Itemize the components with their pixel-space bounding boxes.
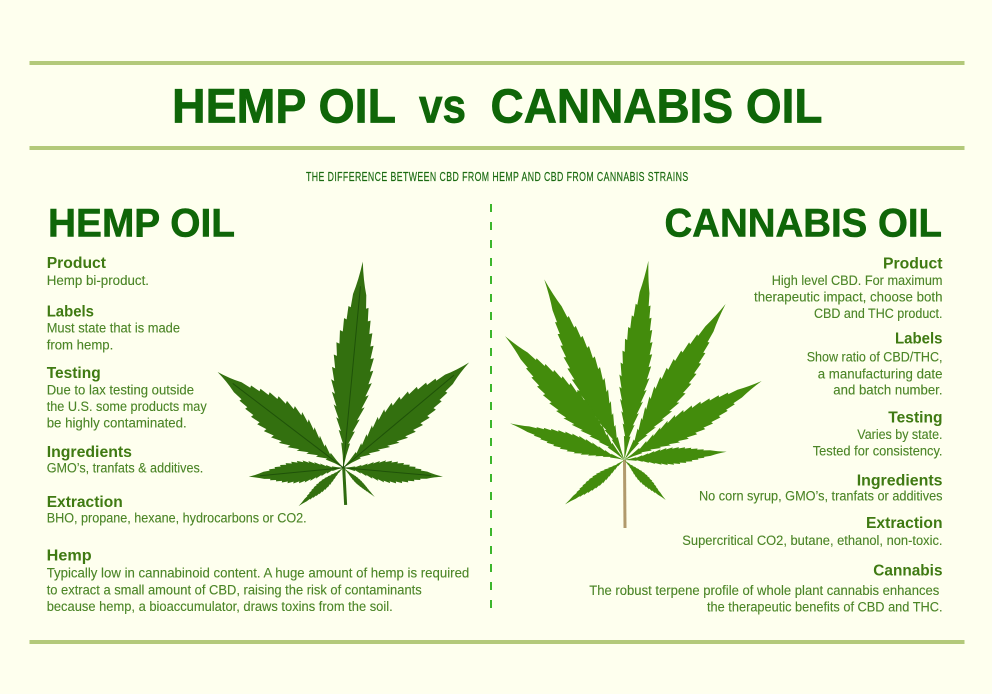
cannabis labels: and batch number. (833, 382, 942, 398)
cannabis product: CBD and THC product. (814, 306, 942, 321)
panel: hemp oil (47, 202, 481, 614)
cannabis ingredients: Ingredients (857, 473, 943, 490)
cannabis labels: Show ratio of CBD/THC, (807, 350, 942, 365)
main title (172, 80, 822, 134)
hemp product: Hemp bi-product. (47, 273, 149, 288)
hemp summary: to extract a small amount of CBD, raising the risk of contaminants (47, 582, 422, 598)
hemp labels: Labels (47, 304, 94, 321)
hemp summary (47, 547, 469, 614)
cannabis testing: Tested for consistency. (813, 444, 942, 459)
bottom rule (30, 640, 964, 644)
cannabis testing: Testing (888, 409, 942, 426)
main title: HEMP OIL (172, 80, 396, 134)
cannabis labels: a manufacturing date (818, 366, 942, 381)
cannabis product: therapeutic impact, choose both (754, 290, 942, 305)
cannabis summary: The robust terpene profile of whole plant cannabis enhances (589, 583, 940, 598)
cannabis extraction: Extraction (866, 515, 942, 532)
cannabis extraction (682, 515, 942, 548)
hemp testing: Testing (47, 365, 101, 382)
cannabis ingredients (699, 473, 943, 504)
hemp ingredients: Ingredients (47, 444, 132, 461)
hemp labels: Must state that is made (47, 321, 180, 336)
icon: cannabis leaf (494, 259, 769, 528)
main title: vs (419, 80, 466, 134)
hemp product (47, 255, 149, 288)
icon: hemp leaf (206, 260, 481, 510)
cannabis testing: Varies by state. (857, 427, 942, 442)
cannabis summary (589, 563, 943, 615)
cannabis summary: Cannabis (873, 563, 943, 580)
cannabis extraction: Supercritical CO2, butane, ethanol, non-toxic. (682, 533, 942, 548)
centre dashed divider (490, 204, 492, 617)
cannabis testing (813, 409, 942, 459)
heading: hemp oil: HEMP OIL (48, 202, 235, 246)
hemp labels (47, 304, 180, 352)
hemp extraction (47, 494, 307, 526)
hemp testing (47, 365, 207, 431)
hemp labels: from hemp. (47, 337, 113, 352)
top title rule (30, 61, 964, 65)
hemp ingredients (47, 444, 203, 476)
hemp summary: because hemp, a bioaccumulator, draws toxins from the soil. (47, 599, 393, 614)
hemp extraction: Extraction (47, 494, 123, 511)
hemp testing: be highly contaminated. (47, 416, 187, 431)
main title: CANNABIS OIL (490, 80, 822, 134)
heading: cannabis oil: CANNABIS OIL (664, 202, 942, 246)
hemp testing: the U.S. some products may (47, 399, 207, 414)
cannabis product: High level CBD. For maximum (772, 273, 942, 288)
cannabis labels: Labels (895, 330, 943, 347)
hemp ingredients: GMO’s, tranfats & additives. (47, 461, 203, 476)
lower title rule (30, 146, 964, 150)
subtitle: THE DIFFERENCE BETWEEN CBD FROM HEMP AND CBD FROM CANNABIS STRAINS (306, 171, 688, 184)
hemp testing: Due to lax testing outside (47, 382, 194, 398)
cannabis ingredients: No corn syrup, GMO’s, tranfats or additives (699, 489, 943, 504)
panel: cannabis oil (494, 202, 943, 615)
hemp summary: Typically low in cannabinoid content. A huge amount of hemp is required (47, 566, 469, 581)
hemp product: Product (47, 255, 107, 272)
hemp summary: Hemp (47, 547, 92, 564)
cannabis product (754, 255, 943, 321)
cannabis labels (807, 330, 943, 398)
cannabis summary: the therapeutic benefits of CBD and THC. (707, 600, 942, 615)
cannabis product: Product (883, 255, 943, 272)
hemp extraction: BHO, propane, hexane, hydrocarbons or CO2. (47, 511, 307, 526)
